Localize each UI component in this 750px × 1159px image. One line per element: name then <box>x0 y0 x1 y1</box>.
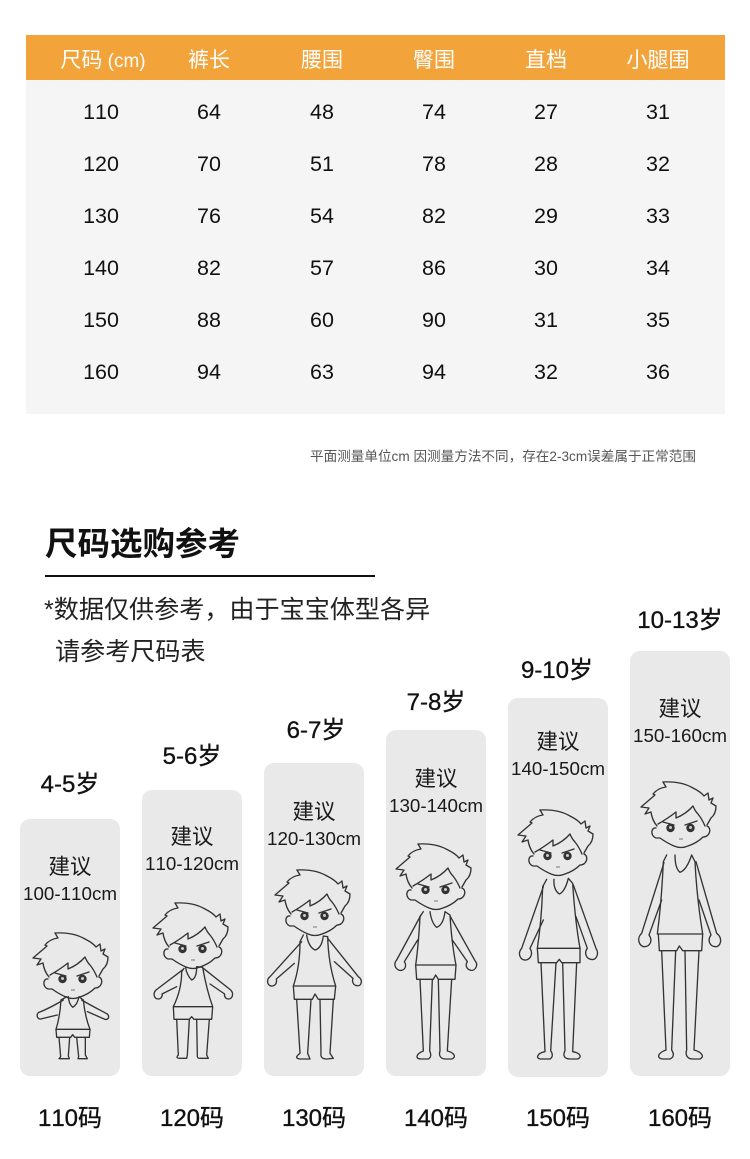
row 140: 57 <box>310 256 334 280</box>
figure: boy 160 <box>639 782 721 1059</box>
recommendation: 130-140cm <box>389 795 483 816</box>
row 150: 88 <box>197 308 221 332</box>
figure: boy 150 <box>518 810 597 1059</box>
row 160: 160 <box>83 360 119 384</box>
panel: size 130 <box>264 717 364 1132</box>
recommendation: 建议 <box>536 730 580 754</box>
recommendation: 120-130cm <box>267 828 361 849</box>
figure: boy 120 <box>153 903 233 1058</box>
row 150: 60 <box>310 308 334 332</box>
recommendation: 100-110cm <box>23 883 117 904</box>
size label: 120码 <box>160 1105 224 1132</box>
age label: 9-10岁 <box>521 657 593 684</box>
row 110: 27 <box>534 100 558 124</box>
recommendation: 110-120cm <box>145 853 239 874</box>
size label: 150码 <box>526 1105 590 1132</box>
age label: 4-5岁 <box>41 771 99 798</box>
row 120: 32 <box>646 152 670 176</box>
card <box>386 730 486 1076</box>
row 110: 31 <box>646 100 670 124</box>
row 160: 94 <box>422 360 446 384</box>
panel: size 120 <box>142 743 242 1132</box>
row 130: 130 <box>83 204 119 228</box>
row 150: 35 <box>646 308 670 332</box>
row 120: 28 <box>534 152 558 176</box>
recommendation: 150-160cm <box>633 725 727 746</box>
row 130: 82 <box>422 204 446 228</box>
row 160: 36 <box>646 360 670 384</box>
figure: boy 130 <box>268 870 361 1059</box>
row 160 <box>83 360 670 384</box>
card <box>142 790 242 1076</box>
row 150: 90 <box>422 308 446 332</box>
panel: size table <box>26 35 725 414</box>
table body background <box>26 80 725 414</box>
row 140: 86 <box>422 256 446 280</box>
disclaimer text: *数据仅供参考，由于宝宝体型各异 <box>44 596 430 624</box>
size label: 140码 <box>404 1105 468 1132</box>
disclaimer text: 请参考尺码表 <box>55 638 206 666</box>
table header row: 腰围 <box>301 49 343 72</box>
heading underline <box>45 575 375 577</box>
row 120: 70 <box>197 152 221 176</box>
card <box>20 819 120 1076</box>
panel: size 160 <box>630 607 730 1132</box>
recommendation <box>267 800 361 849</box>
recommendation: 140-150cm <box>511 758 605 779</box>
row 140: 140 <box>83 256 119 280</box>
row 140 <box>83 256 670 280</box>
row 140: 34 <box>646 256 670 280</box>
measurement note: 平面测量单位cm 因测量方法不同，存在2-3cm误差属于正常范围 <box>310 449 696 464</box>
figure: boy 110 <box>33 933 109 1059</box>
recommendation <box>23 855 117 904</box>
row 110: 48 <box>310 100 334 124</box>
row 120 <box>83 152 670 176</box>
figure: boy 140 <box>395 844 477 1059</box>
table header row: 臀围 <box>413 49 455 72</box>
row 120: 120 <box>83 152 119 176</box>
row 120: 78 <box>422 152 446 176</box>
table header row: 裤长 <box>188 49 230 72</box>
recommendation <box>633 697 727 746</box>
table header row: 小腿围 <box>626 49 690 72</box>
row 150: 31 <box>534 308 558 332</box>
row 160: 94 <box>197 360 221 384</box>
row 120: 51 <box>310 152 334 176</box>
recommendation: 建议 <box>658 697 702 721</box>
recommendation: 建议 <box>170 825 214 849</box>
row 110: 110 <box>83 100 119 124</box>
table header row: 尺码 (cm) <box>60 49 146 72</box>
disclaimer text <box>44 596 430 666</box>
age label: 6-7岁 <box>287 717 345 744</box>
row 130: 29 <box>534 204 558 228</box>
recommendation: 建议 <box>292 800 336 824</box>
row 160: 63 <box>310 360 334 384</box>
panel: size 110 <box>20 771 120 1132</box>
size label: 130码 <box>282 1105 346 1132</box>
row 140: 30 <box>534 256 558 280</box>
panel: size 150 <box>508 657 608 1132</box>
card <box>630 651 730 1076</box>
recommendation: 建议 <box>48 855 92 879</box>
row 130: 54 <box>310 204 334 228</box>
row 150 <box>83 308 670 332</box>
recommendation <box>511 730 605 779</box>
card <box>264 763 364 1076</box>
recommendation <box>145 825 239 874</box>
row 130: 76 <box>197 204 221 228</box>
age label: 10-13岁 <box>637 607 723 634</box>
row 110: 74 <box>422 100 446 124</box>
size label: 160码 <box>648 1105 712 1132</box>
table header row: 直档 <box>525 49 567 72</box>
row 130 <box>83 204 670 228</box>
row 130: 33 <box>646 204 670 228</box>
row 160: 32 <box>534 360 558 384</box>
table header row <box>26 35 725 80</box>
card <box>508 698 608 1077</box>
heading: size guide: 尺码选购参考 <box>45 526 240 562</box>
row 110 <box>83 100 670 124</box>
recommendation: 建议 <box>414 767 458 791</box>
row 150: 150 <box>83 308 119 332</box>
age label: 7-8岁 <box>407 689 465 716</box>
age label: 5-6岁 <box>163 743 221 770</box>
recommendation <box>389 767 483 816</box>
row 110: 64 <box>197 100 221 124</box>
row 140: 82 <box>197 256 221 280</box>
panel: size 140 <box>386 689 486 1132</box>
size label: 110码 <box>38 1105 102 1132</box>
